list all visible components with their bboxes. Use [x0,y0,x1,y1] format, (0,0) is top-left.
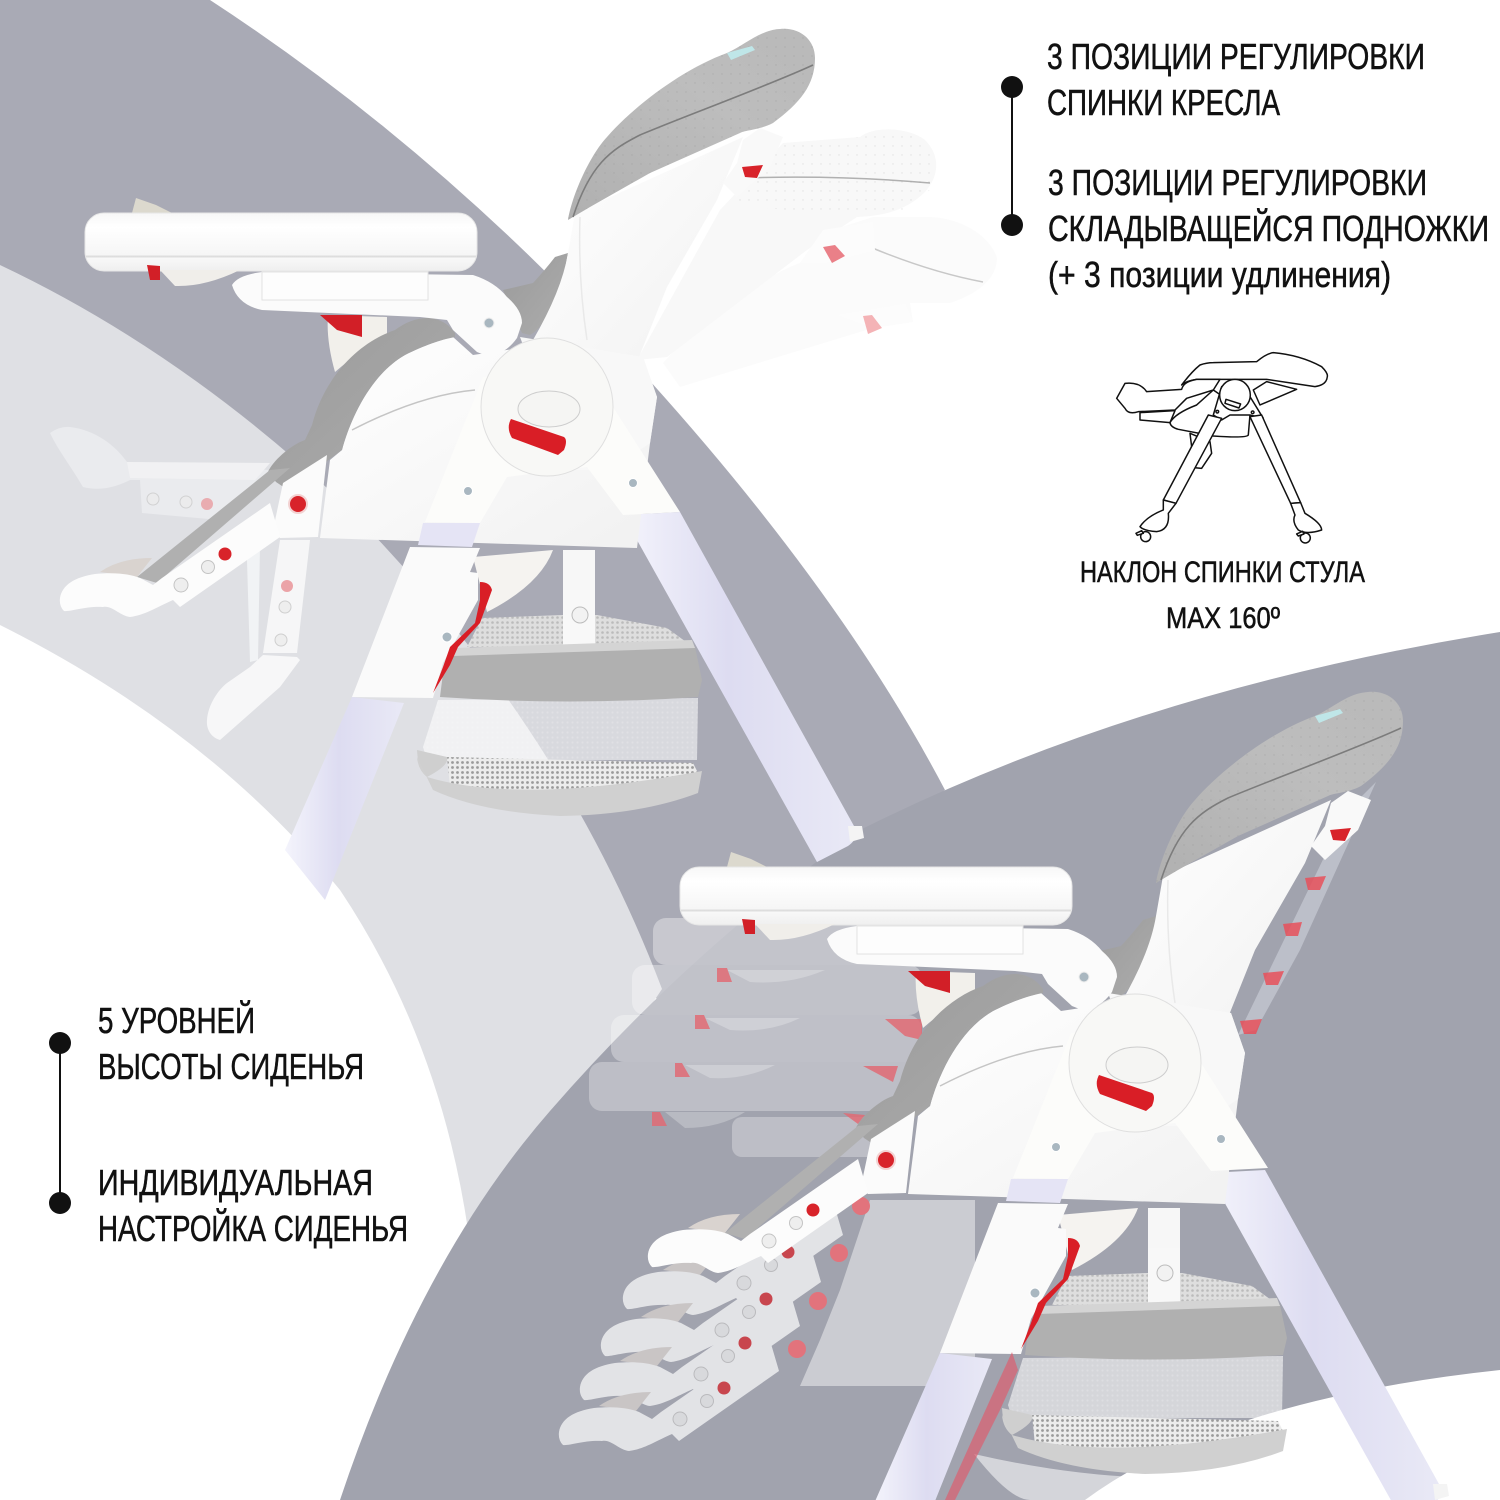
text: seat height levels [98,999,364,1087]
lower chair: tray [680,852,1117,1010]
top chair: backrest and headrest [503,29,815,370]
text: backrest positions [1047,36,1425,123]
ghost footrest, top chair [50,427,270,520]
lower chair [648,692,1449,1500]
background: dark curved band [0,0,945,1000]
text: individual seat setting: ИНДИВИДУАЛЬНАЯ [98,1162,373,1203]
top chair: hip panel, front leg, footrest [60,337,680,900]
lower footrest bracket, top chair [207,540,310,740]
ghost basket and latch, lower chair [945,1352,1259,1500]
ghost bracket area and footrests, lower chair [559,1197,975,1451]
background: white lower left arc [0,625,468,1500]
text: recline caption: МАХ 160º [1166,602,1280,635]
top chair [60,29,864,900]
text: footrest positions: (+ 3 позиции удлинения) [1048,254,1391,295]
text: recline caption [1080,556,1365,635]
ghost trays, lower chair [589,918,923,1157]
top chair: rear leg and basket [417,512,864,862]
text: recline caption: НАКЛОН СПИНКИ СТУЛА [1080,556,1365,589]
background: light curved band [0,265,662,1260]
icon: chair line drawing [1117,353,1327,543]
text: seat height levels: 5 УРОВНЕЙ [98,999,255,1041]
text: backrest positions: СПИНКИ КРЕСЛА [1047,82,1280,123]
lower chair: seat [725,971,1245,1239]
top chair: seat [137,315,657,583]
ghost backrest marks, lower chair [1238,782,1376,1035]
text: individual seat setting: НАСТРОЙКА СИДЕНЬЯ [98,1207,408,1249]
text: seat height levels: ВЫСОТЫ СИДЕНЬЯ [98,1046,364,1087]
connector: lower left [49,1032,71,1214]
background: lower grey panel [340,632,1500,1500]
lower chair: backrest and headrest [1091,692,1403,1033]
top chair: tray [85,198,522,356]
text: individual seat setting [98,1162,408,1249]
ghost backrest positions, top chair [637,129,997,387]
lower chair: hip panel, front leg, footrest [648,993,1268,1500]
text: footrest positions [1048,162,1489,295]
lower chair: rear leg and basket [1002,1170,1449,1500]
connector: upper right [1001,76,1023,236]
